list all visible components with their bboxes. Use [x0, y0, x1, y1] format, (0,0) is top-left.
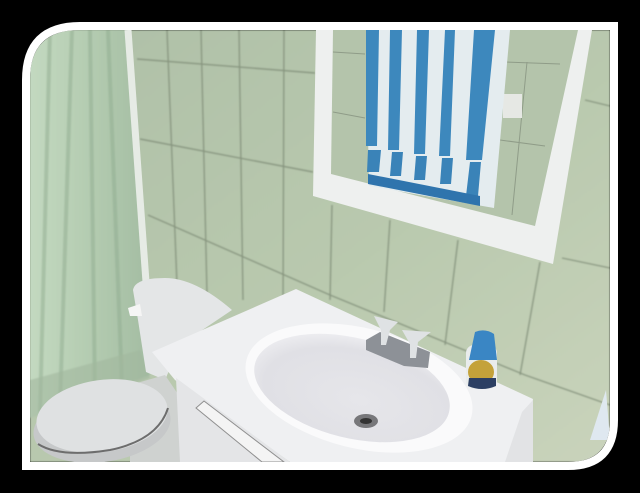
- vanity counter: [152, 289, 533, 462]
- air freshener bottle: [466, 330, 497, 389]
- curtain rail pole: [128, 30, 146, 282]
- tiled wall: [30, 30, 610, 462]
- toilet cistern: [128, 278, 232, 380]
- faucet: [366, 316, 431, 368]
- toilet seat: [34, 379, 170, 462]
- shower curtain: [30, 30, 150, 418]
- floor and toilet bowl: [130, 375, 182, 462]
- sink basin: [246, 324, 472, 452]
- towel corner at lower right: [590, 390, 610, 440]
- mirror: [313, 30, 592, 264]
- switch plate: [503, 94, 522, 118]
- towel: [366, 30, 510, 208]
